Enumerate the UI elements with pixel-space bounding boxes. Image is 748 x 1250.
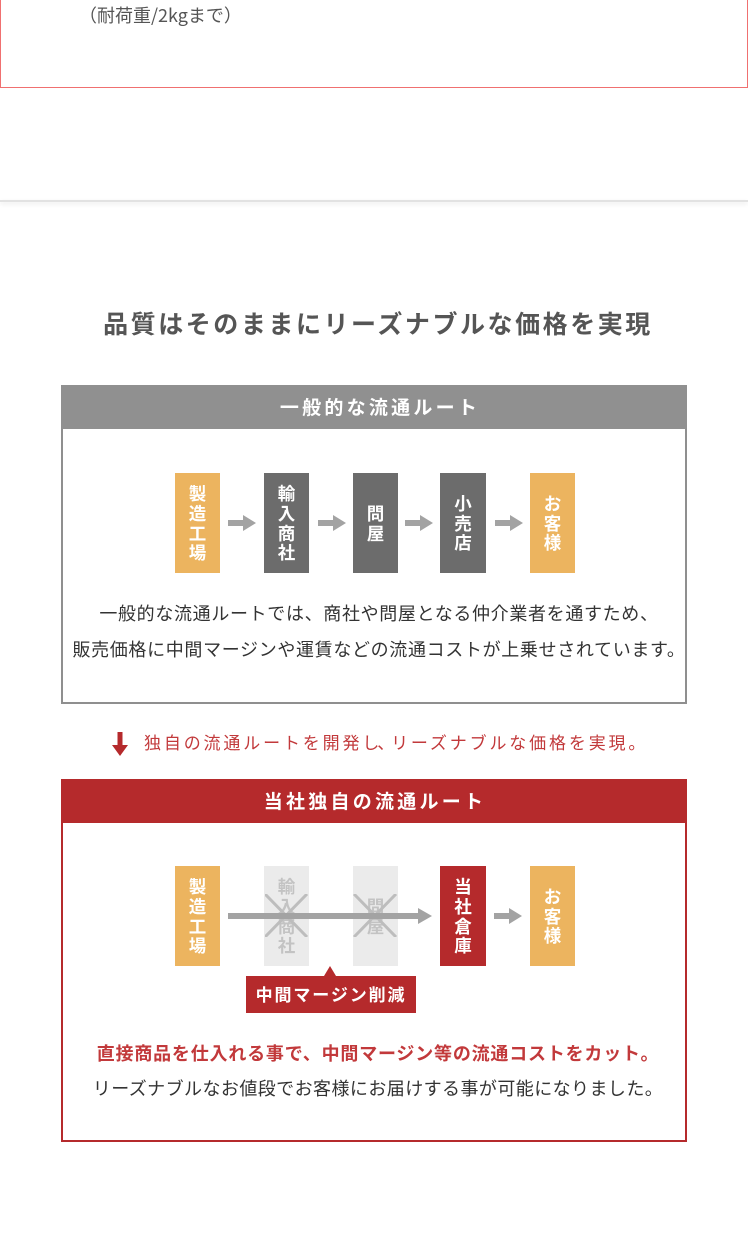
box: own warehouse: 庫	[454, 936, 472, 956]
box: wholesaler: 屋	[367, 524, 384, 544]
box: import trader	[264, 473, 309, 573]
box: customer	[530, 866, 575, 966]
box: manufacturer: 工	[189, 916, 206, 936]
box: import trader: 入	[278, 504, 295, 524]
box: wholesaler removed: 屋	[367, 916, 384, 936]
box: customer: 様	[544, 533, 561, 553]
box: wholesaler removed	[353, 866, 398, 966]
box: import trader removed: 輸	[278, 877, 295, 897]
description: 一般的な流通ルートでは、商社や問屋となる仲介業者を通すため、	[99, 604, 659, 624]
box: customer: お	[544, 887, 561, 907]
callout label	[246, 976, 416, 1013]
description	[72, 604, 686, 660]
box: customer: 客	[544, 514, 561, 534]
box: manufacturer: 造	[189, 897, 206, 917]
top product panel	[0, 0, 748, 88]
box: customer: お	[544, 494, 561, 514]
box: customer	[530, 473, 575, 573]
box: own warehouse	[440, 866, 486, 966]
box: manufacturer	[175, 473, 220, 573]
box: retailer	[440, 473, 486, 573]
box: import trader: 輸	[278, 484, 295, 504]
box: retailer: 店	[454, 533, 472, 553]
box: wholesaler	[353, 473, 398, 573]
box: import trader: 商	[278, 524, 295, 544]
callout pointer	[324, 966, 336, 976]
long arrow	[228, 908, 432, 924]
arrow 4	[495, 515, 523, 531]
description: 販売価格に中間マージンや運賃などの流通コストが上乗せされています。	[72, 640, 686, 660]
box: own warehouse: 倉	[454, 916, 472, 936]
cross marks	[265, 894, 397, 937]
box: import trader: 社	[278, 543, 295, 563]
arrow 1	[228, 515, 256, 531]
title: 品質はそのままにリーズナブルな価格を実現	[103, 311, 653, 339]
box: own warehouse: 当	[454, 877, 472, 897]
box: manufacturer: 場	[189, 936, 206, 956]
panel: general route	[61, 385, 687, 704]
transition message: 独自の流通ルートを開発し、リーズナブルな価格を実現。	[144, 734, 648, 753]
section band shadow	[0, 200, 748, 202]
emphasis text: 直接商品を仕入れる事で、中間マージン等の流通コストをカット。	[97, 1044, 659, 1064]
box: retailer: 売	[454, 514, 472, 534]
load capacity note: （耐荷重/2kgまで）	[79, 2, 242, 28]
callout label: 中間マージン削減	[256, 986, 406, 1005]
arrow	[494, 908, 522, 924]
heading: own route	[61, 779, 687, 823]
box: manufacturer	[175, 866, 220, 966]
description: リーズナブルなお値段でお客様にお届けする事が可能になりました。	[93, 1079, 663, 1099]
panel: own route	[61, 779, 687, 1142]
heading: own route: 当社独自の流通ルート	[264, 792, 486, 813]
box: manufacturer: 場	[189, 543, 206, 563]
box: manufacturer: 工	[189, 524, 206, 544]
box: customer: 客	[544, 907, 561, 927]
box: manufacturer: 造	[189, 504, 206, 524]
box: retailer: 小	[454, 494, 472, 514]
heading: general route	[61, 385, 687, 429]
box: manufacturer: 製	[189, 484, 206, 504]
arrow 3	[405, 515, 433, 531]
box: wholesaler removed: 問	[367, 897, 384, 917]
box: own warehouse: 社	[454, 897, 472, 917]
arrow 2	[318, 515, 346, 531]
callout: margin reduction	[246, 966, 416, 1013]
box: import trader removed	[264, 866, 309, 966]
heading: general route: 一般的な流通ルート	[280, 398, 480, 419]
box: customer: 様	[544, 926, 561, 946]
box: import trader removed: 商	[278, 916, 295, 936]
icon: down arrow	[112, 732, 128, 756]
box: manufacturer: 製	[189, 877, 206, 897]
box: wholesaler: 問	[367, 504, 384, 524]
box: import trader removed: 社	[278, 936, 295, 956]
box: import trader removed: 入	[278, 897, 295, 917]
